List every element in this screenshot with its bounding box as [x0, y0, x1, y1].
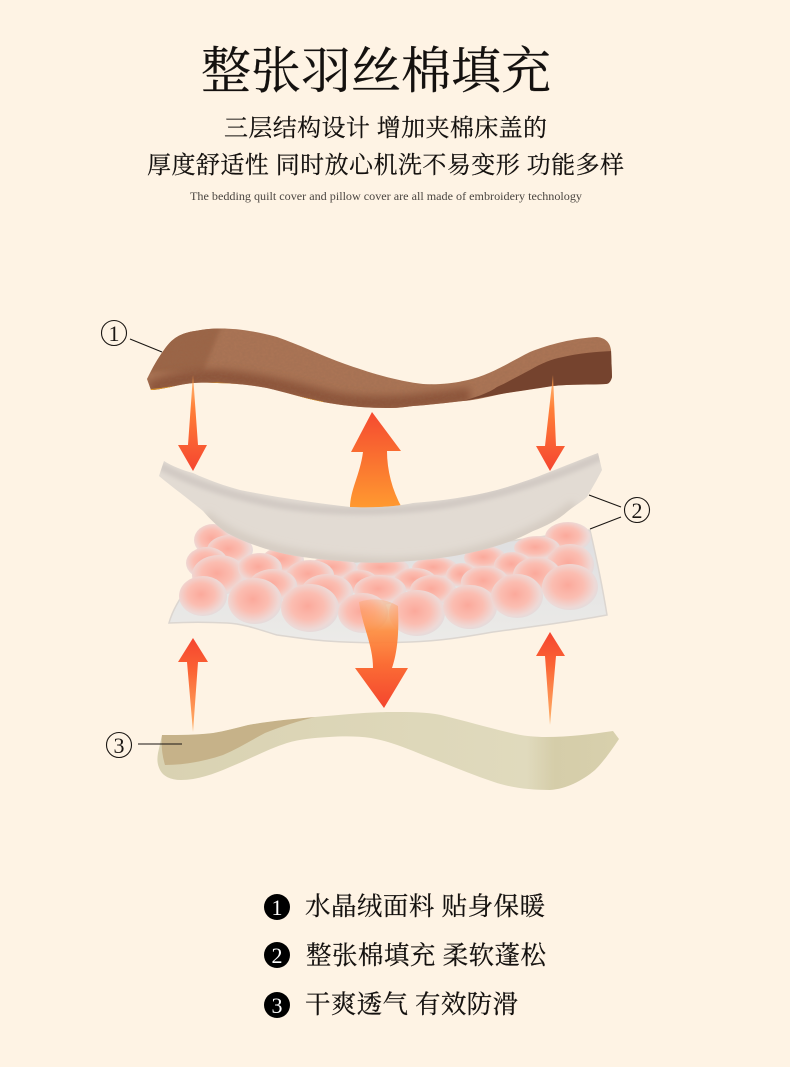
legend item 2: 整张棉填充 柔软蓬松	[306, 941, 546, 970]
layer 1: brown crystal velvet fabric	[147, 328, 612, 408]
layer 3: beige anti-slip base	[157, 712, 619, 790]
arrow: left down	[178, 375, 207, 471]
arrow: center down flame	[355, 599, 408, 708]
subtitle text block: 厚度舒适性 同时放心机洗不易变形 功能多样	[147, 152, 624, 179]
subtitle text block	[147, 115, 624, 179]
arrow: lower right up	[536, 632, 565, 725]
layer 2: quilted fill with bubbles and pad	[159, 453, 607, 643]
bubbles	[179, 522, 598, 636]
legend item 3: 干爽透气 有效防滑	[305, 990, 518, 1019]
legend item 1: 水晶绒面料 贴身保暖	[305, 892, 545, 921]
label 2 with leader lines	[589, 495, 650, 529]
label 3 with leader line	[106, 732, 182, 758]
white base sheet	[169, 530, 607, 643]
label 1 with leader line: 1	[108, 321, 120, 346]
title: 整张羽丝棉填充	[201, 43, 551, 99]
arrow: right down	[536, 375, 565, 471]
subtitle text block: 三层结构设计 增加夹棉床盖的	[224, 115, 547, 142]
label 1 with leader line	[102, 320, 162, 352]
arrow: center up	[350, 412, 402, 508]
english caption: The bedding quilt cover and pillow cover are all made of embroidery technology	[190, 189, 582, 203]
legend item 2: 2	[272, 943, 282, 968]
padding layer	[159, 453, 602, 563]
legend item 1: 1	[272, 895, 282, 920]
arrow: lower left up	[178, 638, 208, 732]
label 2 with leader lines: 2	[632, 498, 642, 523]
label 3 with leader line: 3	[114, 733, 124, 758]
legend item 3: 3	[272, 993, 282, 1018]
